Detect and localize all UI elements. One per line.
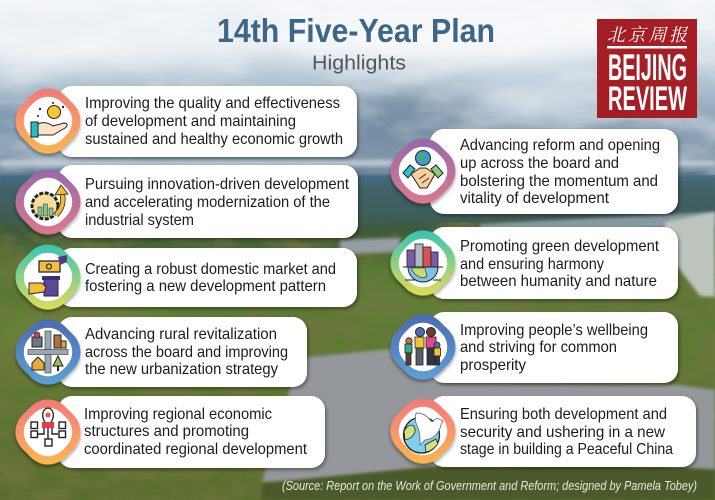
text: and striving for common: [460, 339, 617, 356]
text: fostering a new development pattern: [85, 278, 326, 295]
text: industrial system: [85, 212, 194, 229]
text: Improving people’s wellbeing: [460, 322, 648, 339]
text: and ensuring harmony: [460, 256, 604, 273]
panel: people's wellbeing: [381, 305, 678, 389]
text: [460, 322, 648, 374]
icon: city on globe: [381, 221, 465, 305]
icon: handshake under globe: [381, 129, 465, 213]
icon: hands exchanging money and goods: [6, 235, 90, 319]
panel: quality and effectiveness of growth: [6, 79, 357, 163]
text: the new urbanization strategy: [85, 361, 278, 378]
text: up across the board and: [460, 155, 619, 172]
text: Pursuing innovation-driven development: [85, 176, 350, 193]
text: [84, 406, 308, 458]
logo: Beijing Review: 北京周报: [607, 21, 689, 47]
text: Improving the quality and effectiveness: [85, 95, 340, 112]
text: stage in building a Peaceful China: [460, 441, 673, 458]
text: [85, 261, 336, 295]
text: security and ushering in a new: [460, 424, 666, 441]
subtitle: Highlights: [312, 52, 406, 74]
text: [85, 176, 350, 229]
text: [460, 238, 660, 290]
panel: development and security: [381, 389, 696, 473]
text: Improving regional economic: [84, 406, 272, 423]
panel: domestic market: [6, 235, 357, 319]
icon: hand holding coin: [6, 79, 90, 163]
panel: reform and opening up: [381, 129, 678, 214]
panel: green development: [381, 221, 678, 305]
logo: Beijing Review: [597, 19, 697, 118]
text: between humanity and nature: [460, 273, 657, 290]
panel: rural revitalization: [6, 310, 307, 394]
text: structures and promoting: [84, 423, 249, 440]
text: across the board and improving: [85, 344, 288, 361]
text: [85, 326, 288, 378]
text: [460, 137, 660, 207]
text: Creating a robust domestic market and: [85, 261, 336, 278]
text: sustained and healthy economic growth: [85, 131, 343, 148]
text: vitality of development: [460, 190, 610, 207]
icon: crossroads with buildings: [6, 310, 90, 394]
title: 14th Five-Year Plan: [217, 12, 495, 49]
text: [85, 95, 343, 148]
icon: location pin over network: [6, 390, 90, 474]
text: and accelerating modernization of the: [85, 194, 330, 211]
text: Advancing rural revitalization: [85, 326, 277, 343]
panel: innovation-driven development: [6, 160, 358, 244]
text: Promoting green development: [460, 238, 660, 255]
text: [460, 406, 673, 458]
text: prosperity: [460, 357, 526, 374]
text: Ensuring both development and: [460, 406, 667, 423]
text: of development and maintaining: [85, 113, 296, 130]
icon: gear with rising arrow: [6, 160, 90, 244]
text: Advancing reform and opening: [460, 137, 660, 154]
text: bolstering the momentum and: [460, 173, 658, 190]
panel: regional economic structures: [6, 390, 325, 474]
icon: family of four: [381, 305, 465, 389]
text: coordinated regional development: [84, 441, 308, 458]
icon: dove over globe: [381, 389, 465, 473]
